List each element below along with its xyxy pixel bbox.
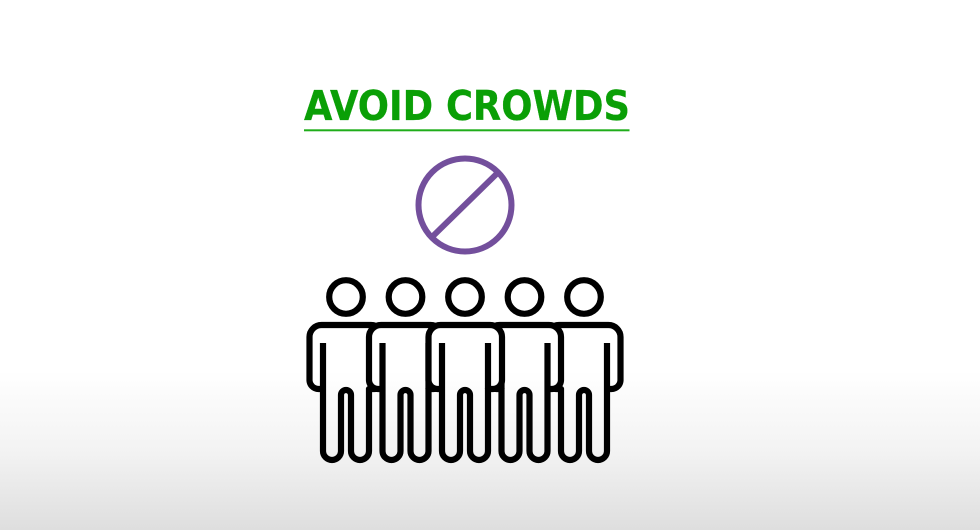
person 2 (369, 280, 442, 460)
person 5 (547, 280, 620, 460)
person 4 (488, 280, 561, 460)
title: AVOID CROWDS (304, 82, 630, 130)
person 1 (310, 280, 383, 460)
person 3 (428, 280, 502, 460)
icon: prohibition sign (418, 158, 512, 252)
icon: crowd of five people (310, 280, 620, 460)
